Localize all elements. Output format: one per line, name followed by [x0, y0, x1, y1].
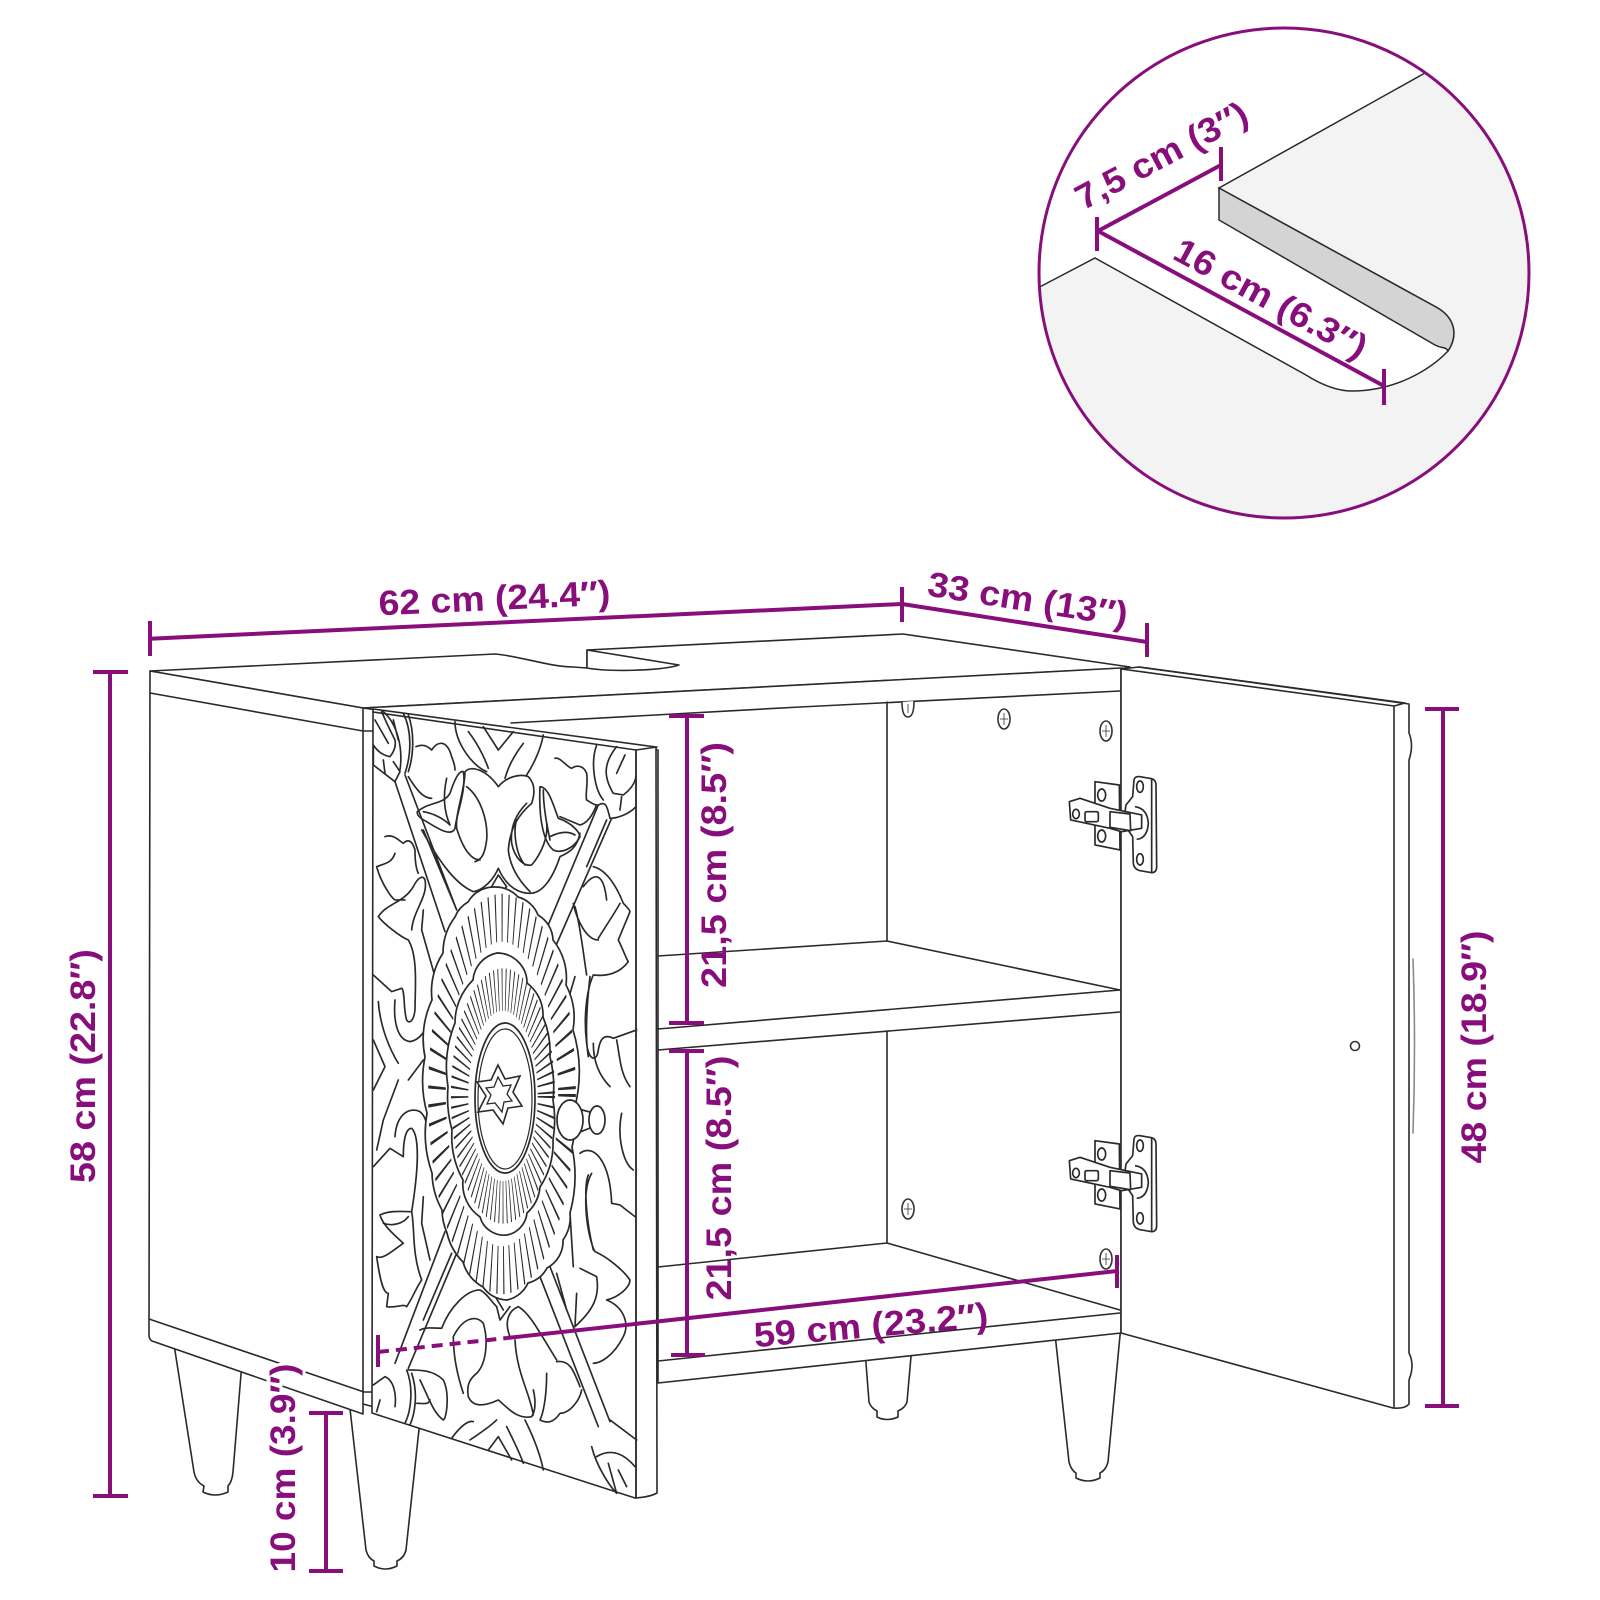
- door slab: [372, 709, 657, 1498]
- door knob: [557, 1100, 605, 1140]
- dimension: height 58 cm: 58 cm (22.8″): [64, 949, 103, 1183]
- dimension: lower shelf height 21,5 cm: 21,5 cm (8.5″): [700, 1056, 739, 1300]
- dimension: interior width 59 cm: [378, 1255, 1117, 1367]
- dimension: width 62 cm: [150, 574, 902, 656]
- dimension: leg height 10 cm: 10 cm (3.9″): [264, 1364, 303, 1572]
- countertop slab: [1040, 73, 1528, 516]
- dimension: notch width 7,5 cm: 7,5 cm (3″): [1069, 94, 1255, 218]
- dimension: depth 33 cm: 33 cm (13″): [925, 565, 1131, 635]
- dimension: door height 48 cm: 48 cm (18.9″): [1455, 931, 1494, 1163]
- middle scalloped ring: [446, 953, 555, 1235]
- dimension: door height 48 cm: [1425, 709, 1494, 1406]
- dimension: upper shelf height 21,5 cm: 21,5 cm (8.5″): [695, 742, 734, 988]
- outer scalloped ring: [423, 887, 579, 1300]
- dimension: upper shelf height 21,5 cm: [669, 716, 734, 1023]
- dimension: height 58 cm: [64, 672, 128, 1496]
- star: [477, 1065, 522, 1124]
- cabinet legs: [173, 1325, 1121, 1569]
- dimension: notch depth 16 cm: [1098, 231, 1384, 405]
- lower hinge: [1069, 1136, 1157, 1232]
- interior back and shelves: [363, 668, 1121, 1383]
- central medallion: [423, 887, 579, 1300]
- dimension: interior width 59 cm: 59 cm (23.2″): [752, 1296, 990, 1355]
- carving: lower half: [373, 1080, 637, 1493]
- dimension: depth 33 cm: [902, 565, 1147, 657]
- circle outline: [1039, 28, 1529, 518]
- dimension: leg height 10 cm: [264, 1364, 343, 1572]
- dimension: width 62 cm: 62 cm (24.4″): [378, 574, 611, 623]
- carved left door: [372, 709, 657, 1498]
- dimension: lower shelf height 21,5 cm: [669, 1051, 739, 1355]
- panel: sink cut-out detail circle: [1038, 26, 1530, 520]
- interior screws: [902, 701, 1112, 1269]
- open right door: [1121, 667, 1414, 1408]
- left side panel: [149, 671, 363, 1414]
- inner rays: [460, 990, 546, 1202]
- top panel with sink notch: [150, 634, 1130, 708]
- carving: upper half: [373, 712, 637, 1090]
- cabinet body: [149, 634, 1130, 1414]
- carved door right inner edge: [635, 750, 637, 1498]
- dimension: notch depth 16 cm: 16 cm (6.3″): [1167, 231, 1374, 367]
- upper hinge: [1069, 777, 1157, 873]
- inner oval: [475, 1023, 535, 1173]
- outer rays: [437, 918, 567, 1270]
